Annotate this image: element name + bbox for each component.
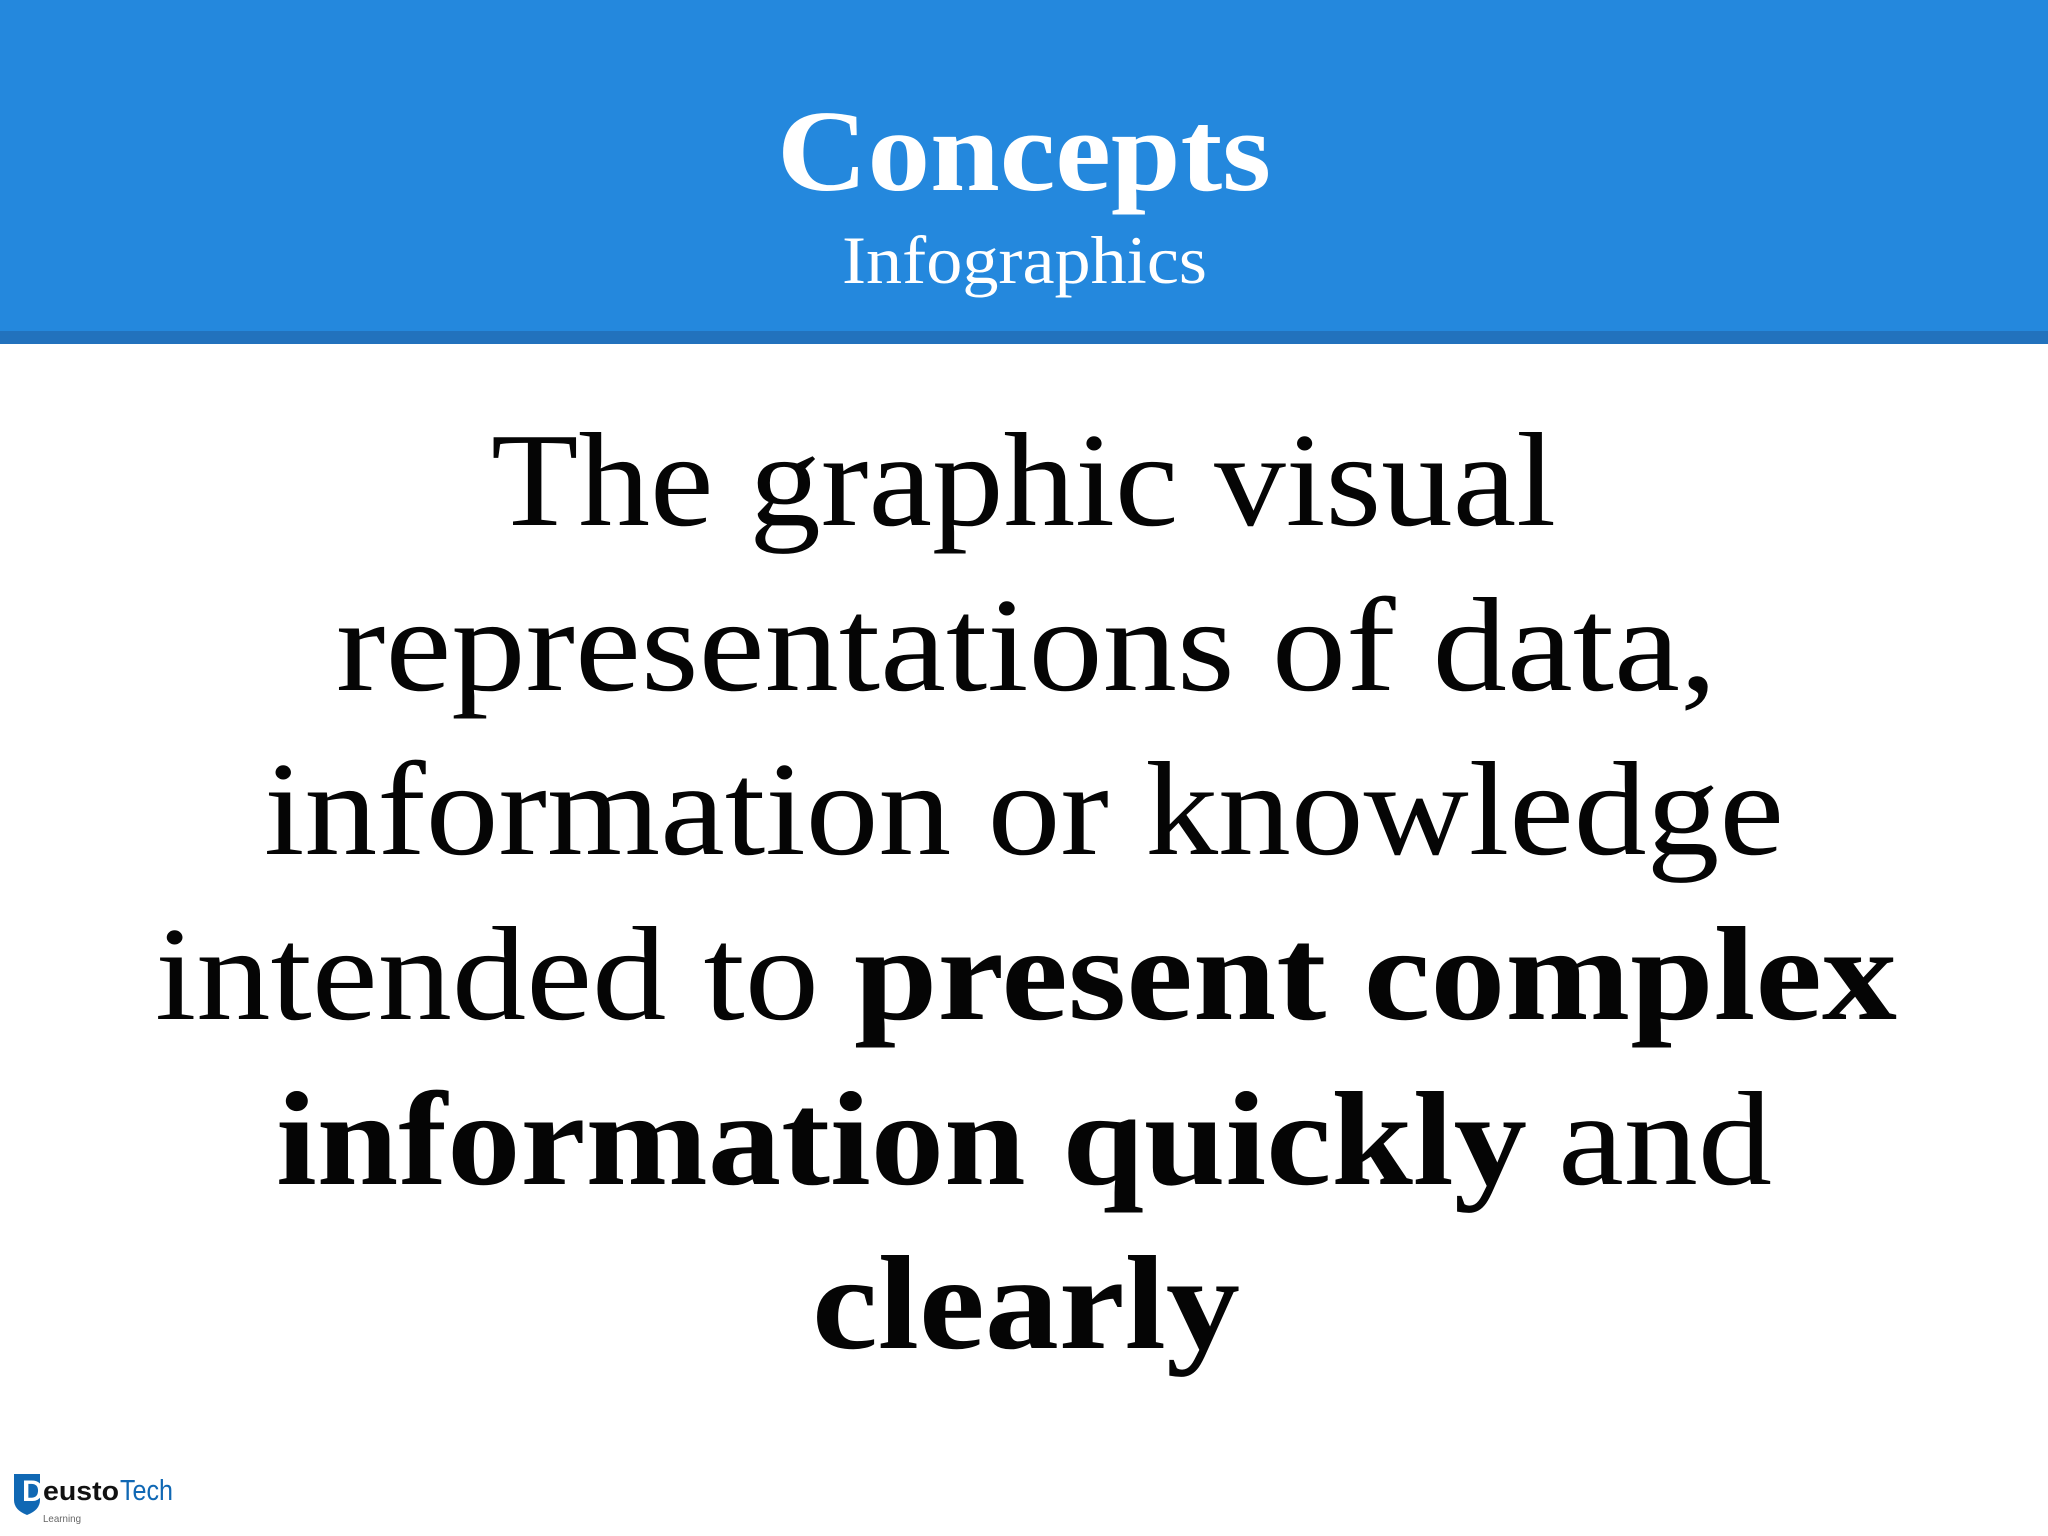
logo: DeustoTech Learning — [14, 1474, 173, 1525]
definition text block: information quickly — [276, 1065, 1527, 1213]
title: Concepts — [777, 88, 1271, 216]
definition text block: representations of data, — [336, 571, 1717, 719]
definition text block: clearly — [812, 1229, 1240, 1377]
definition text block: present complex — [854, 900, 1897, 1048]
logo: DeustoTech Learning: eusto — [43, 1476, 119, 1506]
icon: shield — [14, 1474, 40, 1515]
definition text block: The graphic visual — [491, 406, 1556, 554]
logo: DeustoTech Learning: D — [22, 1475, 44, 1508]
logo: DeustoTech Learning: Tech — [120, 1475, 173, 1507]
subtitle: Infographics — [842, 222, 1207, 298]
definition text block: information or knowledge — [264, 735, 1784, 883]
header banner — [0, 0, 2048, 344]
logo: DeustoTech Learning: Learning — [43, 1513, 81, 1525]
definition text block — [155, 406, 1897, 1377]
definition text block: and — [1558, 1065, 1772, 1213]
definition text block: intended to — [155, 900, 819, 1048]
